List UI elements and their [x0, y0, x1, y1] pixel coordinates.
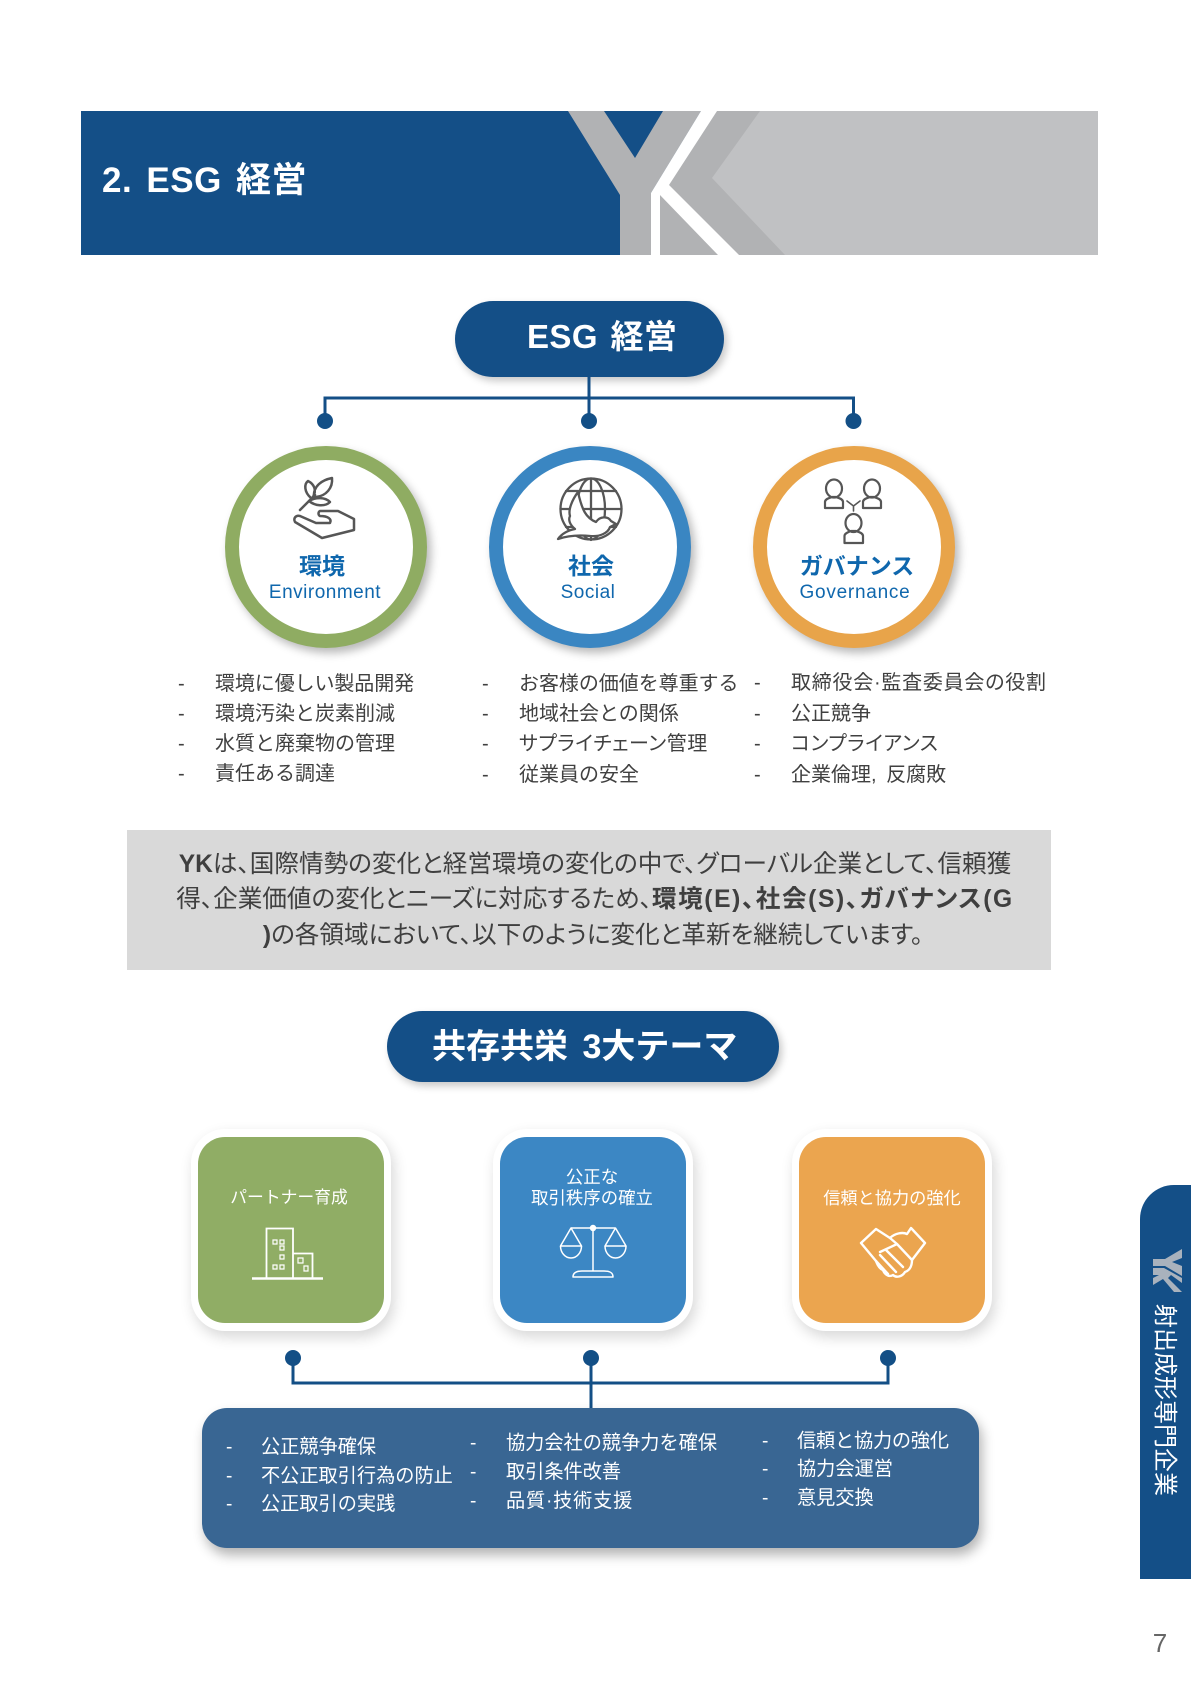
icon: hand with leaf [293, 476, 356, 540]
side tab text: 射出成形専門企業 [1151, 1304, 1178, 1496]
list: column one: 公正取引の実践 [261, 1494, 395, 1515]
label: social: 社会 [568, 553, 614, 579]
list: governance items: 取締役会·監査委員会の役割 [791, 672, 1047, 694]
list: environment items: 水質と廃棄物の管理 [215, 733, 395, 755]
label: environment: 環境 [299, 553, 345, 579]
icon: YK logo [1153, 1249, 1182, 1292]
list: environment items: - [178, 733, 185, 755]
list: governance items: - [754, 672, 761, 694]
list: environment items [178, 673, 414, 785]
label: Social english: Social [561, 582, 615, 603]
icon: handshake [860, 1226, 926, 1278]
icon: buildings [252, 1228, 323, 1280]
panel: social circle [489, 446, 691, 648]
card label: 信頼と協力の強化 [823, 1188, 961, 1208]
card fill [799, 1137, 985, 1323]
text block: YK statement: 得、企業価値の変化とニーズに対応するため、環境(E)、社会(S)、ガバナンス(G [176, 886, 1014, 913]
list: column one: - [226, 1466, 232, 1487]
list: column one: - [226, 1494, 232, 1515]
list: column three: 意見交換 [797, 1488, 874, 1509]
list: environment items: 責任ある調達 [215, 763, 335, 785]
list: governance items: - [754, 703, 761, 725]
list: column one [226, 1436, 453, 1515]
card: trust and cooperation [792, 1129, 992, 1331]
list: governance items: - [754, 733, 761, 755]
list: social items: サプライチェーン管理 [519, 733, 708, 755]
list: governance items: コンプライアンス [791, 733, 938, 755]
list: environment items: 環境に優しい製品開発 [215, 673, 414, 695]
card label: パートナー育成 [230, 1188, 348, 1207]
text block: YK statement: )の各領域において、以下のように変化と革新を継続しています。 [263, 922, 923, 949]
list: environment items: - [178, 763, 185, 785]
connector: top tree [317, 377, 862, 429]
banner title: 2. ESG 経営 [102, 161, 307, 200]
list: column three: 信頼と協力の強化 [797, 1431, 949, 1452]
list: environment items: - [178, 673, 185, 695]
side tab [1140, 1185, 1191, 1579]
list: column three: - [762, 1488, 768, 1509]
list: governance items: - [754, 764, 761, 786]
text block: YK statement: YKは、国際情勢の変化と経営環境の変化の中で、グローバル企業として、信頼獲 [179, 851, 1011, 878]
pill title: ESG 経営 [527, 318, 677, 355]
page number: 7 [1153, 1628, 1167, 1658]
list: column two [470, 1432, 717, 1512]
pill: three themes [387, 1011, 779, 1082]
list: governance items: 公正競争 [791, 703, 871, 725]
list: environment items: 環境汚染と炭素削減 [215, 703, 395, 725]
card: fair trade order [493, 1129, 693, 1331]
list: column two: - [470, 1462, 476, 1483]
list: column one: 不公正取引行為の防止 [261, 1466, 453, 1487]
connector: bottom tree [285, 1350, 896, 1408]
list: column two: 品質·技術支援 [506, 1491, 633, 1512]
panel: theme details [202, 1408, 979, 1548]
list: column three: - [762, 1431, 768, 1452]
list: governance items [754, 672, 1047, 786]
pill title: 共存共栄 3大テーマ [432, 1028, 737, 1066]
list: social items: 従業員の安全 [519, 764, 639, 786]
list: governance items: 企業倫理, 反腐敗 [791, 764, 946, 786]
card fill [500, 1137, 686, 1323]
text block: YK statement [127, 830, 1051, 970]
list: column one: - [226, 1437, 232, 1458]
header banner [81, 111, 1098, 255]
label: Governance english: Governance [799, 582, 910, 603]
card fill [198, 1137, 384, 1323]
card label line 2: 取引秩序の確立 [531, 1188, 653, 1208]
list: column one: 公正競争確保 [261, 1437, 376, 1458]
list: column two: 取引条件改善 [506, 1462, 621, 1483]
list: column two: - [470, 1491, 476, 1512]
label: governance: ガバナンス [800, 553, 914, 579]
list: social items: お客様の価値を尊重する [519, 673, 738, 695]
icon: governance people [824, 478, 882, 544]
icon: scales [560, 1224, 627, 1278]
list: social items: 地域社会との関係 [519, 703, 679, 725]
list: social items [482, 673, 738, 786]
card label: 公正な [566, 1167, 618, 1187]
list: social items: - [482, 764, 489, 786]
panel: environment circle [225, 446, 427, 648]
list: social items: - [482, 733, 489, 755]
list: column three: - [762, 1459, 768, 1480]
card: partner development [191, 1129, 391, 1331]
list: column two: 協力会社の競争力を確保 [506, 1433, 717, 1454]
list: column three: 協力会運営 [797, 1459, 893, 1480]
list: column three [762, 1430, 949, 1509]
list: social items: - [482, 703, 489, 725]
list: environment items: - [178, 703, 185, 725]
panel: governance circle [753, 446, 955, 648]
pill: ESG management [455, 301, 724, 377]
label: Environment english: Environment [269, 582, 381, 603]
list: column two: - [470, 1433, 476, 1454]
list: social items: - [482, 673, 489, 695]
icon: globe with dove [556, 477, 623, 542]
